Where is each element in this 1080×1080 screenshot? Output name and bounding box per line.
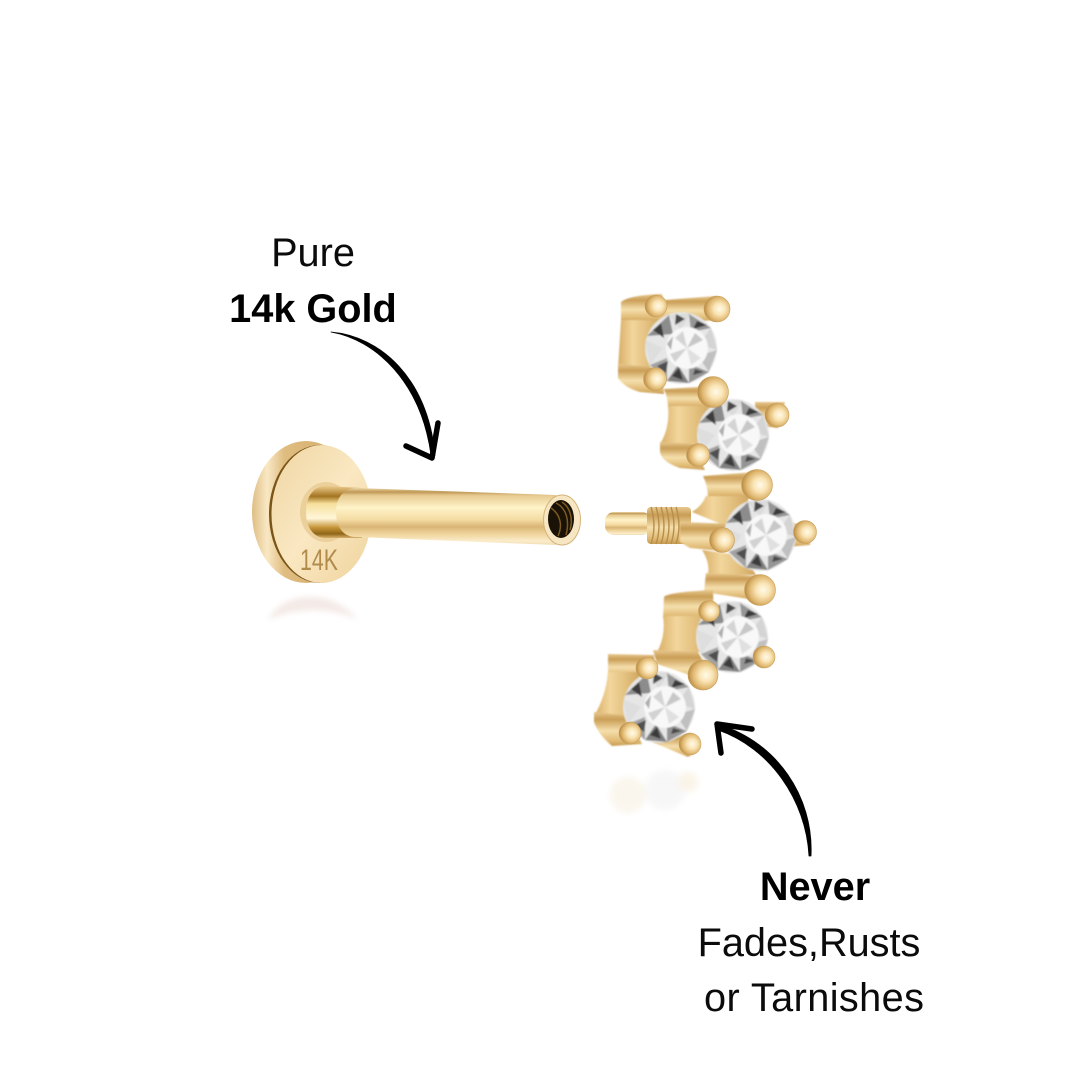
neck (306, 486, 362, 538)
unit 1 (621, 294, 668, 322)
neck socket (300, 482, 352, 542)
unit 4 (663, 590, 714, 620)
label: Never Fades, Rusts or Tarnishes: Fades,Rusts (698, 921, 920, 965)
unit 3 (703, 472, 755, 498)
label: Never Fades, Rusts or Tarnishes: Never (760, 865, 870, 909)
label: Pure 14k Gold: Pure (271, 231, 355, 275)
stone reflection (610, 770, 698, 813)
unit 2 (664, 386, 715, 408)
stones (645, 312, 717, 384)
arrow: points down to the post (331, 332, 438, 458)
setting body (594, 294, 812, 757)
unit 5 (608, 654, 655, 678)
post thread opening (548, 500, 574, 538)
disc shadow line (269, 445, 371, 583)
label: Pure 14k Gold (229, 231, 397, 331)
disc reflection (268, 597, 358, 620)
label: Never Fades, Rusts or Tarnishes (698, 865, 924, 1020)
label: Pure 14k Gold: 14k Gold (229, 287, 397, 331)
prong balls (619, 295, 816, 755)
unit 3 to 4 (702, 550, 756, 575)
threaded pin (605, 507, 691, 544)
disc rim (252, 441, 360, 583)
post end ring (544, 495, 580, 545)
arrow: points up to the stones (717, 724, 811, 856)
earring front: five-stone curved bar (594, 294, 816, 813)
disc face (272, 445, 372, 583)
post barrel (336, 488, 556, 545)
14K stamp: 14K (300, 544, 338, 577)
earring back: flat disc with post (252, 441, 580, 620)
label: Never Fades, Rusts or Tarnishes: or Tarnishes (704, 976, 924, 1020)
